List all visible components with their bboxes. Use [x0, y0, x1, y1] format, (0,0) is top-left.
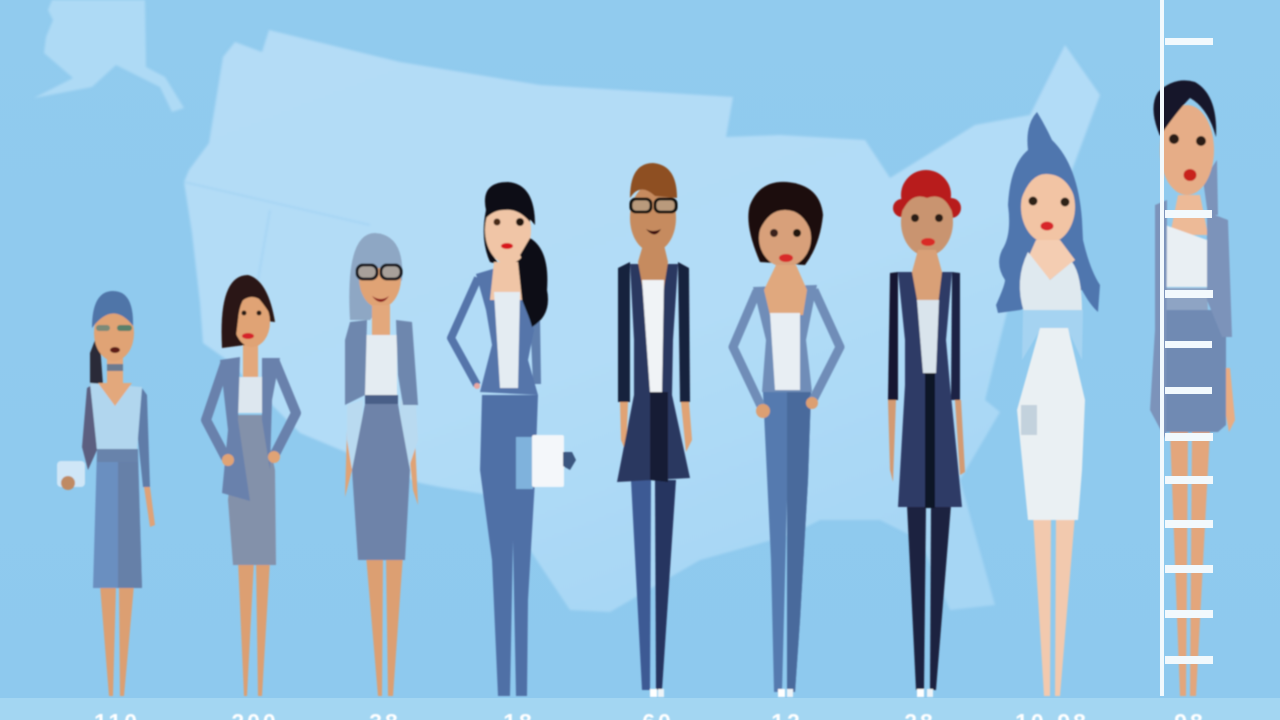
figure 2: woman with dark bob — [206, 275, 296, 696]
figure 7: woman with red hair and navy coat — [888, 170, 965, 697]
map: Alaska — [34, 0, 184, 112]
figure 1: woman with cap and glass — [57, 291, 155, 696]
figure 8: woman with blue wavy hair and white dress — [996, 112, 1100, 696]
ladder — [1160, 0, 1213, 696]
map: contiguous United States — [184, 30, 1100, 612]
bottom band — [0, 698, 1280, 720]
figure 9: woman behind ladder — [1150, 80, 1235, 696]
figure 5: woman with dark long coat and glasses — [617, 163, 692, 697]
bottom value labels — [94, 709, 1206, 720]
figure group — [57, 80, 1235, 697]
figure 6: woman with curly hair and trousers — [733, 182, 840, 697]
figure 3: woman with grey hair and glasses — [345, 233, 418, 696]
figure 4: woman with ponytail and folder — [451, 182, 576, 696]
